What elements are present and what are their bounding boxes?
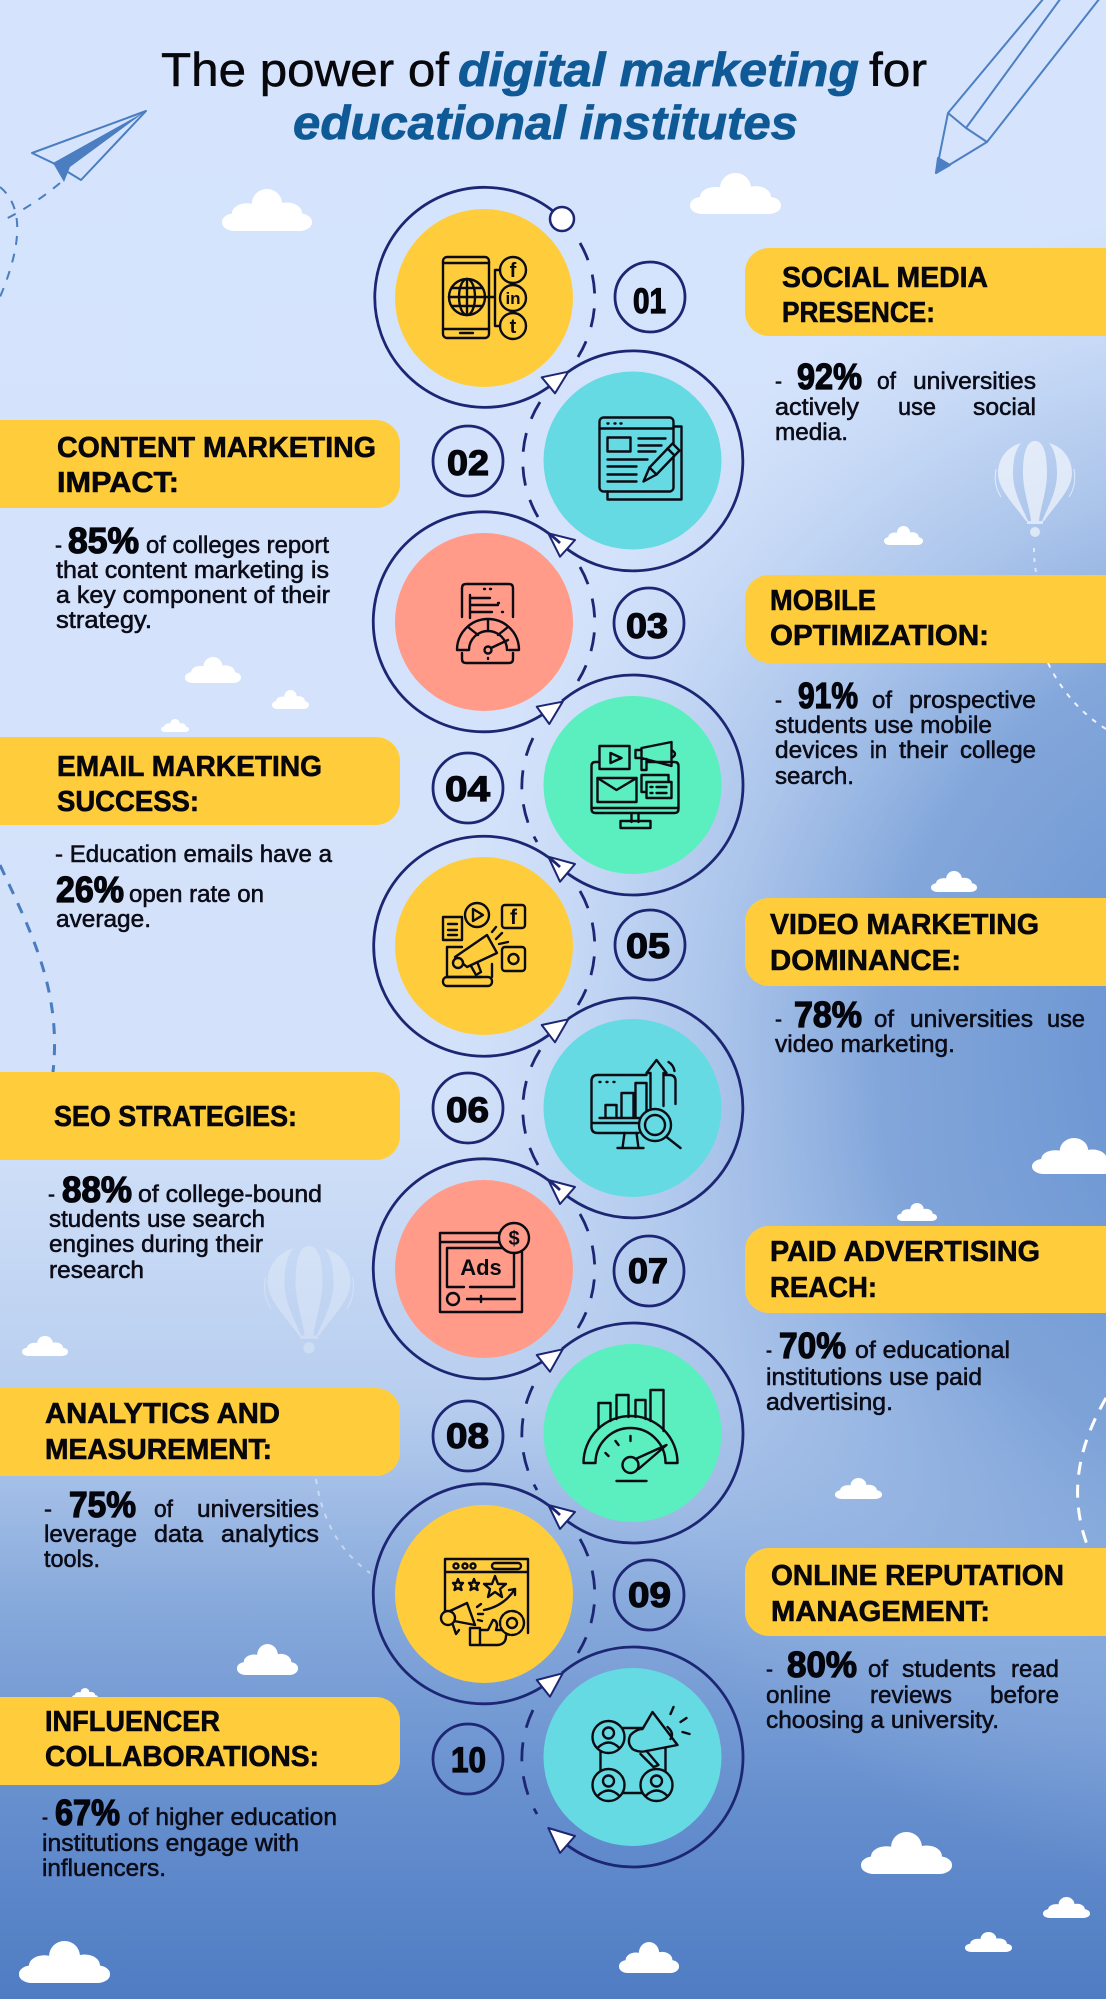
icon: online ads window: Ads <box>460 1255 502 1280</box>
panel: seo strategies: students use search <box>49 1206 265 1233</box>
step 07 circle group <box>373 1159 595 1379</box>
number badge 01 <box>615 262 685 332</box>
panel: video marketing dominance: - <box>775 1006 782 1033</box>
panel: online reputation management <box>745 1548 1106 1734</box>
icon: online ads window: $ <box>508 1228 520 1250</box>
panel: analytics and measurement: leverage <box>44 1521 137 1548</box>
number badge 07: 07 <box>628 1252 668 1291</box>
panel: paid advertising reach <box>745 1226 1106 1416</box>
number badge 04: 04 <box>445 770 491 809</box>
panel: social media presence: media. <box>775 419 848 446</box>
panel: mobile optimization: search. <box>775 763 854 790</box>
panel: online reputation management: online <box>766 1682 831 1709</box>
icon: phone with social networks: t <box>510 316 517 338</box>
number badge 01: 01 <box>633 282 666 321</box>
panel: video marketing dominance: use <box>1047 1006 1085 1033</box>
icon: phone with social networks: in <box>505 289 521 308</box>
panel: social media presence: use <box>898 394 936 421</box>
panel: content marketing impact: that content marketing is <box>56 557 329 584</box>
step 10 circle group <box>522 1647 743 1867</box>
hot air balloon right <box>995 441 1075 577</box>
panel: paid advertising reach: institutions use paid <box>766 1364 982 1391</box>
panel: paid advertising reach: REACH: <box>770 1272 877 1304</box>
panel: social media presence: social <box>973 394 1036 421</box>
panel: email marketing success: open rate on <box>129 881 264 908</box>
step 08 circle group <box>522 1323 743 1543</box>
panel: influencer collaborations: INFLUENCER <box>45 1706 220 1738</box>
step 06 circle group <box>523 998 743 1218</box>
number badge 08 <box>433 1401 503 1471</box>
panel: online reputation management: MANAGEMENT: <box>771 1596 990 1628</box>
panel: mobile optimization: prospective <box>909 687 1036 714</box>
number badge 09: 09 <box>628 1576 671 1615</box>
icon: megaphone and social media: f <box>510 906 518 929</box>
panel: analytics and measurement: tools. <box>44 1546 100 1573</box>
panel: online reputation management: students <box>902 1656 996 1683</box>
panel: social media presence: - <box>775 368 782 395</box>
panel: paid advertising reach: - <box>766 1337 772 1364</box>
icon: megaphone and social media <box>443 903 525 986</box>
step 03 circle group <box>373 512 595 732</box>
panel: influencer collaborations: institutions engage with <box>42 1830 299 1857</box>
panel: content marketing impact: strategy. <box>56 607 152 634</box>
icon: email and video marketing monitor <box>592 742 678 828</box>
hot air balloon left <box>265 1246 353 1353</box>
panel: mobile optimization: their <box>899 737 948 764</box>
step 01 circle group <box>375 187 595 407</box>
panel: email marketing success: SUCCESS: <box>57 786 199 818</box>
panel: seo strategies <box>0 1072 400 1284</box>
panel: online reputation management: - <box>766 1656 773 1683</box>
panel: analytics and measurement: - <box>44 1496 52 1523</box>
panel: online reputation management: 80% <box>787 1644 857 1685</box>
title: educational institutes <box>293 96 798 149</box>
icon: report with gauge <box>457 584 519 663</box>
panel: video marketing dominance: VIDEO MARKETING <box>770 909 1039 941</box>
panel: video marketing dominance: DOMINANCE: <box>770 945 961 977</box>
panel: online reputation management: reviews <box>870 1682 952 1709</box>
paper plane <box>0 111 146 297</box>
panel: analytics and measurement: analytics <box>221 1521 319 1548</box>
number badge 05 <box>615 910 685 980</box>
panel: influencer collaborations: of higher education <box>128 1804 337 1831</box>
panel: seo strategies: 88% <box>62 1169 132 1210</box>
panel: online reputation management: before <box>990 1682 1059 1709</box>
dashed flight paths <box>0 663 1106 1573</box>
panel: email marketing success: average. <box>56 906 151 933</box>
icon: bars and speedometer <box>584 1390 678 1481</box>
panel: analytics and measurement: data <box>154 1521 204 1548</box>
panel: mobile optimization: of <box>872 687 892 714</box>
panel: online reputation management: read <box>1011 1656 1059 1683</box>
panel: email marketing success <box>0 737 400 933</box>
panel: social media presence: actively <box>775 394 859 421</box>
icon: influencer network with megaphone <box>592 1707 690 1801</box>
panel: content marketing impact: 85% <box>68 520 139 561</box>
number badge 06 <box>433 1073 503 1143</box>
panel: paid advertising reach: 70% <box>779 1325 846 1366</box>
panel: social media presence: 92% <box>797 356 862 397</box>
panel: analytics and measurement: MEASUREMENT: <box>45 1434 272 1466</box>
title: for <box>869 43 927 96</box>
panel: mobile optimization: 91% <box>798 675 858 716</box>
panel: paid advertising reach: advertising. <box>766 1389 893 1416</box>
icon: phone with social networks <box>443 257 526 339</box>
icon: reviews window with megaphone, thumb and gear <box>441 1559 528 1645</box>
number badge 10 <box>433 1724 503 1794</box>
panel: paid advertising reach: PAID ADVERTISING <box>770 1236 1040 1268</box>
panel: seo strategies: research <box>49 1257 144 1284</box>
panel: mobile optimization: in <box>870 737 887 764</box>
panel: social media presence: SOCIAL MEDIA <box>782 262 988 294</box>
icon: analytics monitor with magnifier <box>592 1060 680 1148</box>
step 02 circle group <box>523 351 743 571</box>
panel: seo strategies: SEO STRATEGIES: <box>54 1101 297 1133</box>
panel: seo strategies: of college-bound <box>138 1181 322 1208</box>
number badge 08: 08 <box>446 1417 489 1456</box>
panel: content marketing impact: of colleges report <box>146 532 329 559</box>
panel: analytics and measurement: universities <box>197 1496 319 1523</box>
panel: analytics and measurement <box>0 1388 400 1573</box>
panel: analytics and measurement: of <box>154 1496 173 1523</box>
panel: analytics and measurement: 75% <box>69 1484 136 1525</box>
step 04 circle group <box>522 675 743 895</box>
panel: social media presence <box>745 248 1106 446</box>
panel: content marketing impact: IMPACT: <box>57 467 179 499</box>
panel: seo strategies: engines during their <box>49 1231 263 1258</box>
panel: influencer collaborations: 67% <box>55 1792 120 1833</box>
panel: content marketing impact: a key component of their <box>56 582 330 609</box>
panel: mobile optimization: devices <box>775 737 858 764</box>
title: digital marketing <box>458 43 859 96</box>
number badge 06: 06 <box>446 1091 489 1130</box>
panel: email marketing success: EMAIL MARKETING <box>57 751 322 783</box>
panel: email marketing success: 26% <box>56 869 124 910</box>
panel: online reputation management: choosing a university. <box>766 1707 999 1734</box>
panel: mobile optimization <box>745 575 1106 790</box>
number badge 04 <box>433 753 503 823</box>
panel: influencer collaborations: COLLABORATIONS: <box>45 1741 319 1773</box>
panel: mobile optimization: students use mobile <box>775 712 992 739</box>
panel: seo strategies: - <box>48 1181 55 1208</box>
panel: mobile optimization: OPTIMIZATION: <box>770 620 989 652</box>
number badge 05: 05 <box>626 927 670 966</box>
step 05 circle group <box>374 836 595 1056</box>
number badge 09 <box>614 1560 684 1630</box>
panel: content marketing impact <box>0 420 400 634</box>
panel: social media presence: universities <box>913 368 1036 395</box>
number badge 03 <box>614 588 684 658</box>
panel: video marketing dominance: universities <box>910 1006 1033 1033</box>
panel: online reputation management: of <box>868 1656 888 1683</box>
panel: social media presence: PRESENCE: <box>782 297 935 329</box>
panel: video marketing dominance: of <box>874 1006 894 1033</box>
panel: content marketing impact: - <box>55 532 62 559</box>
panel: mobile optimization: MOBILE <box>770 585 876 617</box>
panel: influencer collaborations: - <box>42 1804 48 1831</box>
panel: social media presence: of <box>877 368 896 395</box>
panel: email marketing success: - Education emails have a <box>55 841 333 868</box>
panel: mobile optimization: - <box>775 687 782 714</box>
number badge 10: 10 <box>451 1741 486 1780</box>
panel: video marketing dominance: video marketing. <box>775 1031 955 1058</box>
panel: video marketing dominance: 78% <box>794 994 862 1035</box>
icon: phone with social networks: f <box>510 260 517 282</box>
panel: influencer collaborations <box>0 1697 400 1882</box>
panel: mobile optimization: college <box>960 737 1036 764</box>
panel: influencer collaborations: influencers. <box>42 1855 166 1882</box>
panel: video marketing dominance <box>745 898 1106 1058</box>
title <box>161 43 927 149</box>
panel: content marketing impact: CONTENT MARKETING <box>57 432 376 464</box>
pencil <box>936 0 1100 173</box>
panel: analytics and measurement: ANALYTICS AND <box>45 1398 280 1430</box>
number badge 02 <box>433 426 503 496</box>
icon: online ads window <box>440 1223 529 1312</box>
number badge 07 <box>614 1236 684 1306</box>
icon: content page and pencil <box>600 418 682 500</box>
panel: online reputation management: ONLINE REPUTATION <box>771 1560 1064 1592</box>
number badge 02: 02 <box>447 444 489 483</box>
panel: paid advertising reach: of educational <box>855 1337 1010 1364</box>
number badge 03: 03 <box>626 607 668 646</box>
title: The power of <box>161 43 450 96</box>
step 09 circle group <box>373 1484 595 1704</box>
